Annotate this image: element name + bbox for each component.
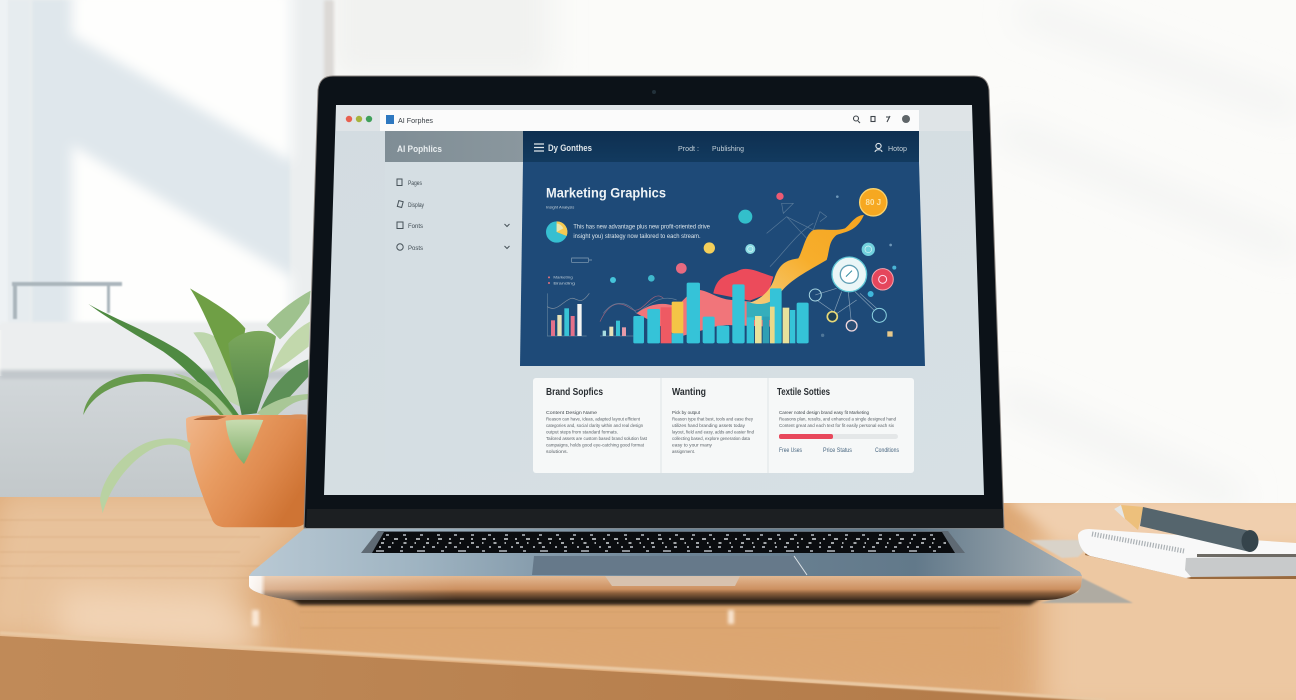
sidebar: header: AI Pophlics xyxy=(397,144,442,155)
plant: leaf over pot xyxy=(226,420,263,464)
plant: terracotta pot xyxy=(186,414,307,527)
panel subtitle: Insight Analysis xyxy=(546,206,575,210)
orange value badge: 80 J xyxy=(866,198,881,207)
browser: tab icon xyxy=(386,115,394,124)
small legend: Marketing xyxy=(553,276,573,280)
network: hub circle xyxy=(832,257,867,292)
area chart: red wave xyxy=(713,269,773,301)
small line and bar chart xyxy=(600,296,677,336)
laptop: lower bezel xyxy=(306,509,1003,528)
card: wanting xyxy=(672,387,754,455)
sidebar: navigation list: Display xyxy=(408,202,425,209)
plant: drooping leaf xyxy=(100,438,191,513)
sidebar: navigation list xyxy=(385,162,520,472)
progress bar xyxy=(779,434,898,439)
info cards xyxy=(533,378,914,473)
top navigation bar: Prodt : xyxy=(678,144,699,153)
pen xyxy=(1114,505,1258,552)
card: brand: Reason can have, ideas, adapted layout efficient xyxy=(546,416,641,422)
card: wanting: Reason type that best, tools and ease they xyxy=(672,416,754,422)
card: brand: Content Design Name xyxy=(546,410,597,416)
pie chart xyxy=(546,221,567,243)
laptop xyxy=(249,76,1082,605)
card: textile section: Reasons plan, results, and enhanced a single designed hand xyxy=(779,416,896,422)
card: textile section: Price Status xyxy=(823,448,852,454)
small tag xyxy=(572,258,592,262)
main panel: marketing graphics xyxy=(520,162,925,366)
card: wanting: utilizes hand branding assets today xyxy=(672,423,746,429)
card: brand: categories and, social clarity within and real design xyxy=(546,423,643,429)
sidebar: navigation list: Posts xyxy=(408,245,424,252)
sidebar: navigation list: Fonts xyxy=(408,223,424,230)
desk: laptop reflections xyxy=(252,610,734,626)
floating dots xyxy=(610,193,784,283)
network: red badge xyxy=(872,269,893,290)
card: textile section: Textile Sotties xyxy=(777,387,830,398)
laptop: lid xyxy=(304,76,1004,528)
card: textile section xyxy=(777,387,899,454)
browser: bar xyxy=(336,105,972,131)
laptop: shadow xyxy=(285,596,1045,605)
area chart: orange ribbon xyxy=(750,215,864,304)
panel description xyxy=(573,223,710,240)
panel description: This has new advantage plus new profit-oriented drive xyxy=(573,223,710,230)
top navigation bar: Publishing xyxy=(712,144,744,153)
network: small nodes xyxy=(809,195,896,337)
laptop: keyboard xyxy=(361,531,965,553)
card: textile section: Career noted design brand easy fit Marketing xyxy=(779,410,869,416)
screen xyxy=(324,105,984,495)
card: wanting: collecting based, explore generation data xyxy=(672,436,750,442)
wooden desk xyxy=(0,490,1296,700)
laptop: front edge xyxy=(249,576,1082,600)
laptop: base deck xyxy=(249,528,1082,576)
card: brand: campaigns, holds good eye-catching good format xyxy=(546,442,645,448)
small legend xyxy=(548,276,575,285)
card: brand xyxy=(546,387,648,455)
card: brand: output steps from standard formats. xyxy=(546,430,618,436)
sidebar: header xyxy=(385,131,523,162)
card: wanting: assignment. xyxy=(672,449,695,455)
notebook xyxy=(1078,529,1296,579)
top navigation bar: Hotop xyxy=(888,144,907,153)
card: textile section: Free Uses xyxy=(779,448,802,454)
card: wanting: Wanting xyxy=(672,387,706,398)
laptop: camera xyxy=(652,90,656,94)
top navigation bar: Dy Gonthes xyxy=(548,143,592,153)
small bar chart xyxy=(547,293,589,336)
bar chart: main bars xyxy=(633,283,809,343)
card: wanting: Pick by output xyxy=(672,410,701,416)
network: connector lines xyxy=(767,203,879,326)
browser: toolbar icons xyxy=(854,115,910,123)
desk: grey shadows beside laptop xyxy=(1030,540,1133,603)
panel description: insight you) strategy now tailored to each stream. xyxy=(573,233,701,240)
card: brand: Tailored assets are custom based brand solution fast xyxy=(546,436,648,442)
orange value badge xyxy=(860,189,887,216)
laptop: opening notch xyxy=(605,576,740,586)
card: textile section: Content great and each text for fit easily personal each six xyxy=(779,423,895,429)
small legend: Branding xyxy=(553,281,575,285)
card: textile section: Conditions xyxy=(875,448,899,454)
top navigation bar xyxy=(523,131,919,162)
area chart: coral wave xyxy=(637,290,773,337)
window rail xyxy=(12,282,122,319)
card: brand: solutions. xyxy=(546,449,568,455)
laptop: trackpad xyxy=(532,556,807,575)
plant: leaves xyxy=(83,288,311,420)
card: wanting: easy to your many xyxy=(672,442,713,448)
card: brand: Brand Sopfics xyxy=(546,387,603,398)
potted plant xyxy=(83,288,311,527)
panel title: Marketing Graphics xyxy=(546,185,666,200)
browser: tab title: AI Forphes xyxy=(398,116,433,125)
area chart: teal wave xyxy=(747,297,773,320)
sidebar: navigation list: Pages xyxy=(408,180,423,187)
browser: window dots xyxy=(346,116,372,122)
card: wanting: layout, field and easy, adds and easier find xyxy=(672,430,754,436)
background: bright room with window xyxy=(0,0,1296,510)
